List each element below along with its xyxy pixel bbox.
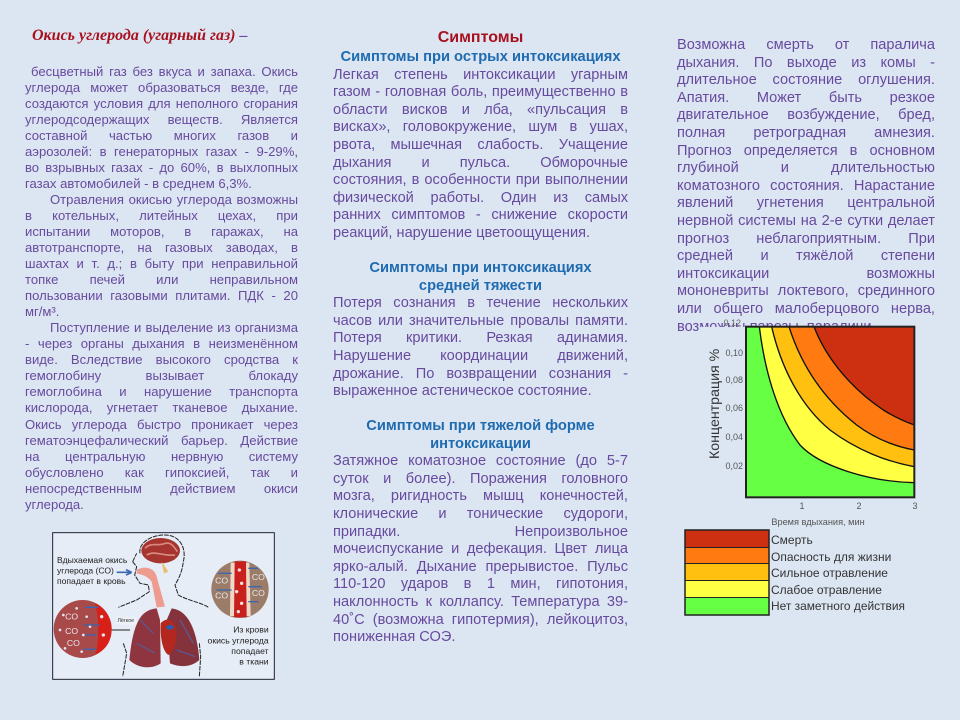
text block: left column: гематоэнцефалический барьер. Действие [25, 433, 298, 448]
axis labels: 0,02 [725, 461, 743, 471]
axis labels [723, 318, 743, 471]
text block: right column: длительное состояние оглушения. [677, 72, 935, 88]
legend: Слабое отравление [771, 583, 882, 597]
panel: severe intoxication: пониженная СОЭ. [333, 629, 455, 645]
panel: acute intoxication: дыхания и пульса. Обморочные [333, 155, 628, 171]
text block: left column: мг/м³. [25, 304, 59, 319]
panel: severe intoxication: наклонность к коллапсу. Температура 39- [333, 594, 628, 610]
text block: right column: коматозного состояния. Нарастание [677, 178, 935, 194]
panel: severe intoxication [333, 418, 628, 645]
lungs [129, 608, 199, 667]
text block: left column: во взрывных газах - до 60%, в выхлопных [25, 160, 298, 175]
text block: left column: создаются условия для неполного сгорания [25, 96, 298, 111]
text block: left column: топке печей или неправильном [25, 272, 298, 287]
text block: right column: или общего малоберцового нерва, [677, 301, 935, 317]
text block: left column: виде. Вследствие высокого сродства к [25, 352, 298, 367]
panel: severe intoxication: 40˚С (возможна гипотермия), лейкоцитоз, [333, 612, 628, 628]
illustration: carbon monoxide path in the body [53, 533, 274, 679]
text block: left column: гемоглобину вызывает блокаду [25, 368, 298, 383]
heart [161, 620, 177, 655]
text block: left column: аэрозолей: в генераторных газах - 9-29%, [25, 144, 298, 159]
axis labels: 0,12 [723, 318, 741, 328]
labels: Вдыхаемая окись [57, 555, 128, 565]
text block: left column: составной частью многих газов и [25, 128, 298, 143]
brain [141, 538, 180, 573]
text block: right column: возможны парезы, параличи [677, 318, 871, 334]
illustration: carbon monoxide path in the body: попадает [231, 646, 269, 656]
legend: Опасность для жизни [771, 550, 891, 564]
text block: left column: в котельных, литейных цехах, при [25, 208, 298, 223]
airway [137, 568, 165, 607]
text block: left column [25, 64, 298, 512]
panel: severe intoxication: припадки. Непроизвольное [333, 524, 628, 540]
illustration: carbon monoxide path in the body: Из крови [233, 624, 269, 634]
axis labels: 0,06 [725, 403, 743, 413]
text block: left column: углеродсодержащих веществ. Является [25, 112, 298, 127]
circle: lung tissue: CO [65, 611, 78, 621]
text block: left column: углерода может образоваться везде, где [25, 80, 298, 95]
illustration: carbon monoxide path in the body: в ткани [239, 656, 269, 666]
circle: blood to tissue: CO [252, 572, 265, 582]
legend: Смерть [771, 533, 813, 547]
panel: severe intoxication: мозга, ригидность мышц конечностей, [333, 488, 628, 504]
heading: acute: Симптомы при острых интоксикациях [340, 49, 621, 65]
text block: right column: Возможна смерть от паралича [677, 37, 935, 53]
text block: right column: Апатия. Может быть резкое [677, 90, 935, 106]
panel: acute intoxication: рвота, мышечная слабость. Учащение [333, 137, 628, 153]
chart: concentration vs time: 1 [799, 501, 805, 511]
text block: right column [677, 37, 935, 334]
panel: acute intoxication: реакций, нарушение цветоощущения. [333, 225, 590, 241]
text block: right column: мононевриты локтевого, срединного [677, 283, 935, 299]
legend [685, 530, 905, 615]
panel: acute intoxication: висках», головокружение, шум в ушах, [333, 119, 628, 135]
text block: right column: явлений угнетения центральной [677, 195, 935, 211]
text block: right column: средней и тяжёлой степени [677, 248, 935, 264]
circle: blood to tissue: CO [215, 590, 228, 600]
text block: right column: нервной системы на 2-е сутки делает [677, 213, 935, 229]
heading: symptoms: Симптомы [438, 29, 523, 46]
panel: severe intoxication: мочеиспускание и дефекация. Цвет лица [333, 541, 628, 557]
text block: left column: бесцветный газ без вкуса и запаха. Окись [31, 64, 298, 78]
panel: moderate intoxication: часов или значительные провалы памяти. [333, 313, 628, 329]
heading: moderate: Симптомы при интоксикациях [369, 260, 592, 276]
circle: blood to tissue: CO [215, 575, 228, 585]
panel: severe intoxication: клонические и тонические судороги, [333, 506, 628, 522]
text block: left column: Отравления окисью углерода возможны [50, 192, 298, 207]
label: lungs [116, 617, 137, 625]
panel: moderate intoxication: выраженное астеническое состояние. [333, 383, 592, 399]
axis labels: 0,08 [725, 375, 743, 385]
panel: acute intoxication [333, 49, 628, 241]
text block: right column: прогноз неблагоприятным. При [677, 231, 935, 247]
text block: left column: Окись углерода быстро проникает через [25, 417, 298, 432]
text block: right column: Прогноз определяется в основном [677, 143, 935, 159]
text block: left column: углерода. [25, 497, 84, 512]
text block: left column: газах автомобилей - в среднем 6,3%. [25, 176, 252, 191]
text block: left column: обусловлено как гипоксией, так и [25, 465, 298, 480]
chart: concentration vs time: 2 [856, 501, 862, 511]
panel: severe intoxication: Затяжное коматозное состояние (до 5-7 [333, 453, 628, 469]
panel: acute intoxication: ранних симптомов - снижение скорости [333, 207, 628, 223]
panel: moderate intoxication: Потеря сознания в течение нескольких [333, 295, 628, 311]
axis labels: 0,10 [725, 348, 743, 358]
text block: right column: дыхания. По выходе из комы - [677, 55, 935, 71]
panel: moderate intoxication: Потеря критики. Резкая адинамия. [333, 330, 628, 346]
heading: severe [366, 418, 595, 452]
labels: углерода (СО) [57, 565, 114, 575]
text block: left column: автотранспорте, на газовых заводах, в [25, 240, 298, 255]
labels [57, 555, 128, 586]
circle: blood to tissue: CO [252, 588, 265, 598]
y axis title: Концентрация % [707, 348, 723, 459]
heading: moderate: средней тяжести [419, 278, 542, 294]
title: Окись углерода (угарный газ) – [32, 27, 248, 44]
heading: moderate [369, 260, 592, 294]
text block: right column: полная ретроградная амнезия. [677, 125, 935, 141]
arrow [117, 570, 132, 575]
heading: severe: интоксикации [430, 436, 531, 452]
panel: moderate intoxication: дрожание. По возвращении сознания - [333, 366, 628, 382]
chart: concentration vs time: 3 [912, 501, 918, 511]
text block: right column: интоксикации возможны [677, 266, 935, 282]
legend: Нет заметного действия [771, 599, 905, 613]
text block: right column: двигательное возбуждение, бред, [677, 107, 935, 123]
axis labels: 0,04 [725, 432, 743, 442]
illustration: carbon monoxide path in the body: окись углерода [208, 635, 269, 645]
text block: left column: испытании моторов, в гаражах, на [25, 224, 298, 239]
panel: acute intoxication: состояния, в особенности при выполнении [333, 172, 628, 188]
body outline [118, 535, 208, 677]
text block: left column: на центральную нервную систему [25, 449, 298, 464]
panel: severe intoxication: ярко-алый. Дыхание прерывистое. Пульс [333, 559, 628, 575]
text block: left column: кислорода, угнетает тканевое дыхание. [25, 400, 298, 415]
chart: concentration vs time [700, 318, 935, 527]
panel: acute intoxication: области висков и лба, «пульсация в [333, 102, 628, 118]
text block: left column: - через органы дыхания в неизменённом [25, 336, 298, 351]
circle: blood to tissue [211, 561, 269, 618]
panel: acute intoxication: физической работы. Один из самых [333, 190, 628, 206]
panel: moderate intoxication [333, 260, 628, 399]
circle: lung tissue [54, 600, 112, 658]
text block: left column: пользовании газовыми плитами. ПДК - 20 [25, 288, 298, 303]
panel: severe intoxication: 110-120 ударов в 1 мин, гипотония, [333, 576, 628, 592]
text block: right column: глубиной и длительностью [677, 160, 935, 176]
heading: severe: Симптомы при тяжелой форме [366, 418, 595, 434]
labels: попадает в кровь [57, 576, 126, 586]
panel: moderate intoxication: Нарушение координации движений, [333, 348, 628, 364]
panel: acute intoxication: Легкая степень интоксикации угарным [333, 67, 628, 83]
x axis title: Время вдыхания, мин [771, 517, 865, 527]
legend: Сильное отравление [771, 566, 888, 580]
text block: left column: шахтах и т. д.; в быту при неправильной [25, 256, 298, 271]
panel: severe intoxication: суток и более). Поражения головного [333, 471, 628, 487]
text block: left column: Поступление и выделение из организма [50, 320, 298, 335]
circle: lung tissue: CO [65, 626, 78, 636]
text block: left column: гемоглобина и нарушение транспорта [25, 384, 298, 399]
circle: lung tissue: CO [67, 638, 80, 648]
label: lungs: Лёгкое [117, 618, 134, 624]
text block: left column: непосредственным действием окиси [25, 481, 298, 496]
panel: acute intoxication: газом - головная боль, преимущественно в [333, 84, 628, 100]
